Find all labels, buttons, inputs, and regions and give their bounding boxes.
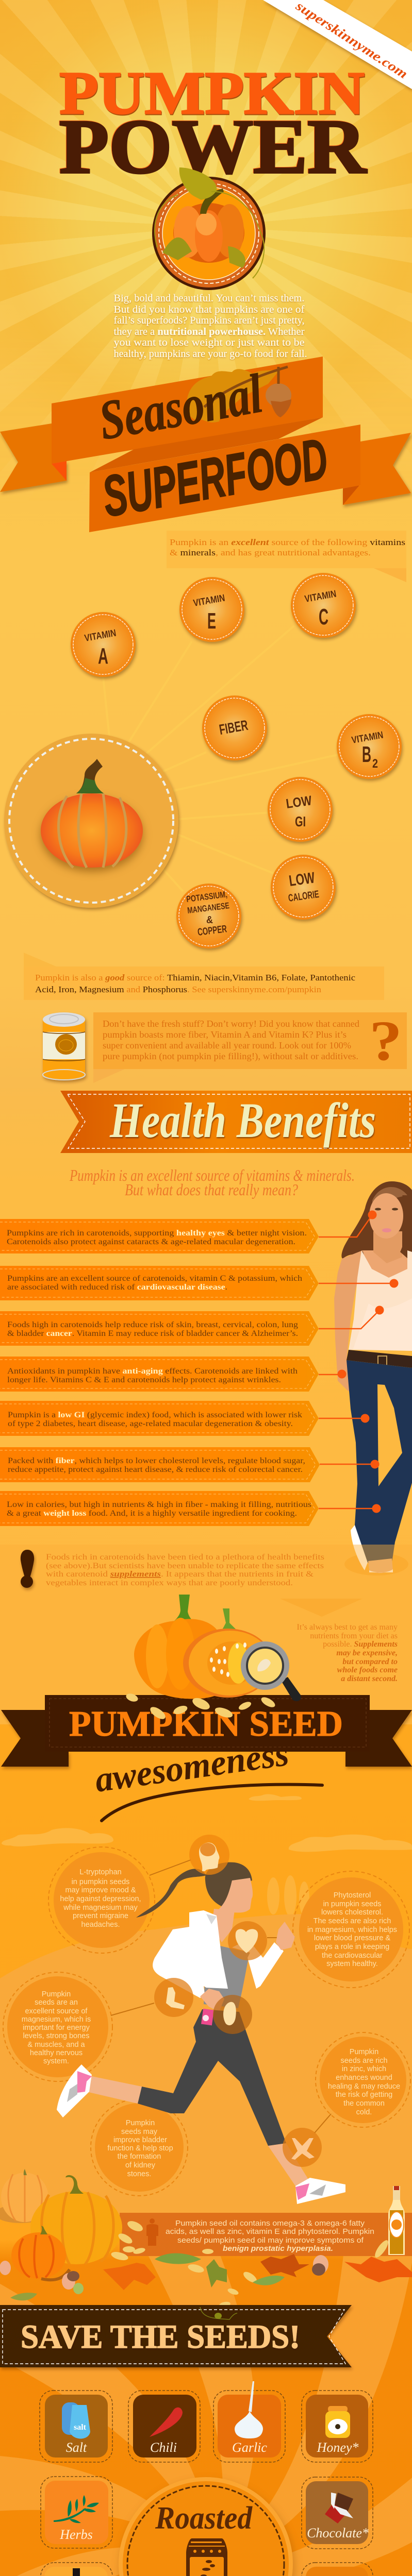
card: salt: Salt [66, 2440, 87, 2455]
info bubble: zinc: enhances wound [336, 2074, 392, 2082]
benefit: low GI: of type 2 diabetes, heart disease, age-related macular degeneration & obesity. [8, 1419, 293, 1428]
callout: get nutrients from diet: whole foods come [337, 1666, 398, 1674]
info bubble: magnesium: seeds are an [35, 1998, 78, 2007]
callout: get nutrients from diet [280, 1599, 398, 1683]
badge: vitamin A: A [98, 643, 108, 669]
info bubble: phytosterol: lowers cholesterol. [321, 1908, 383, 1917]
title [59, 59, 367, 190]
icon: pumpkin [41, 759, 143, 868]
icon: oven [186, 2538, 227, 2576]
pumpkin seeds falling [125, 1692, 276, 1721]
info bubble: tryptophan: while magnesium may [63, 1904, 138, 1912]
badge: vitamin B2: B [362, 742, 371, 767]
icon: exclamation mark [21, 1550, 34, 1588]
band: pumpkin seed oil: benign prostatic hyperplasia. [223, 2245, 333, 2253]
badge: vitamin B2: 2 [372, 757, 378, 771]
card: chocolate: Chocolate* [307, 2526, 369, 2540]
icon: chili [150, 2408, 183, 2437]
badge: potassium manganese copper: POTASSIUM, [186, 889, 228, 904]
badge: low calorie: CALORIE [288, 889, 320, 904]
callout: get nutrients from diet: nutrients from your diet as [310, 1632, 398, 1640]
icon: chocolate bar [325, 2493, 353, 2523]
callout: get nutrients from diet: but compared to [342, 1657, 398, 1666]
intro text: Big, bold and beautiful. You can’t miss them. [113, 293, 304, 304]
info bubble: bladder [91, 2099, 188, 2196]
badge: fiber [202, 696, 267, 760]
panel: roasted pumpkin seeds [121, 2479, 291, 2576]
banner: save the seeds: SAVE THE SEEDS! [21, 2318, 300, 2355]
icon: pumpkin badge [152, 167, 266, 290]
info bubble: phytosterol: in magnesium, which helps [307, 1926, 397, 1934]
connector lines: body to bubbles [111, 1860, 331, 2133]
icon: person [146, 2218, 158, 2246]
info bubble: magnesium [3, 1972, 112, 2081]
badge: vitamin B2 [337, 714, 402, 779]
organ icon: kidney [213, 1995, 252, 2034]
icon: oil bottle [388, 2186, 405, 2255]
info bubble: tryptophan: prevent migraine [73, 1912, 128, 1920]
callout: get nutrients from diet: possible. Supplements [323, 1640, 398, 1649]
benefit: cardiovascular: are associated with reduced risk of cardiovascular disease . [7, 1283, 227, 1292]
badge: low GI: GI [295, 814, 306, 829]
info bubble: bladder: Pumpkin [126, 2119, 155, 2127]
benefit: cardiovascular: Pumpkins are an excellent source of carotenoids, vitamin C & potassium, which [7, 1274, 302, 1283]
corner ribbon: superskinnyme.com [263, 0, 412, 89]
icon: question mark: ? [369, 1009, 402, 1072]
banner: pumpkin seed [1, 1695, 412, 1767]
callout: excellent source: & minerals , and has great nutritional advantages. [170, 548, 371, 557]
icon: sauce bottle [65, 2568, 86, 2576]
callout: get nutrients from diet: It’s always best to get as many [296, 1623, 398, 1632]
callout: supplements warning: Foods rich in carotenoids have been tied to a plethora of health benefits [46, 1553, 324, 1562]
callout: canned pumpkin: Don’t have the fresh stuff? Don’t worry! Did you know that canned [103, 1019, 359, 1029]
card: garlic: Garlic [232, 2440, 267, 2455]
info bubble: magnesium: levels, strong bones [23, 2032, 89, 2040]
benefit: healthy eyes [0, 1211, 376, 1253]
badge: vitamin E: E [207, 608, 216, 634]
callout: good source: Pumpkin is also a good source of: Thiamin, Niacin,Vitamin B6, Folate, Pantothenic [35, 973, 355, 982]
info bubble: tryptophan [48, 1847, 155, 1953]
icon: garlic [235, 2381, 263, 2438]
badge: vitamin C: C [319, 604, 328, 630]
info bubble: tryptophan: may improve mood & [65, 1886, 136, 1894]
illustration: autumn pumpkins and leaves [0, 2169, 412, 2308]
info bubble: phytosterol: lower blood pressure & [314, 1934, 390, 1942]
info bubble: bladder: the formation [118, 2153, 161, 2161]
ribbon: seasonal superfood [0, 357, 411, 532]
callout: supplements warning: vegetables interact in complex ways that are poorly understood. [46, 1579, 293, 1587]
badge: vitamin A [71, 612, 136, 677]
benefit: cardiovascular [0, 1266, 398, 1300]
badge: potassium manganese copper [176, 884, 241, 948]
subheading [69, 1166, 355, 1199]
info bubble: bladder: improve bladder [113, 2136, 167, 2144]
icon: salt and pepper: salt [74, 2423, 87, 2432]
benefit: fiber: Packed with fiber, which helps to lower cholesterol levels, regulate blood sugar, [8, 1456, 305, 1465]
benefit: weight loss: Low in calories, but high in nutrients & high in fiber - making it filling, nutritious [7, 1500, 311, 1509]
connector lines [103, 626, 338, 891]
badge: vitamin B2: VITAMIN [351, 730, 384, 746]
badge: potassium manganese copper: COPPER [197, 923, 228, 938]
benefit: weight loss [0, 1491, 381, 1526]
callout: get nutrients from diet: a distant second. [341, 1674, 398, 1683]
info bubble: tryptophan: headaches. [81, 1921, 120, 1929]
benefit: anti-aging: Antioxidants in pumpkin have anti-aging effects. Carotenoids are linked with [7, 1367, 298, 1376]
info bubble: bladder: of kidney [125, 2161, 156, 2170]
info bubble: zinc: the common [343, 2099, 385, 2108]
card: salt [40, 2391, 112, 2462]
banner: pumpkin seed: PUMPKIN SEED [69, 1704, 343, 1744]
badge: low GI: LOW [285, 792, 313, 811]
benefit: fiber [0, 1447, 380, 1482]
intro text: But did you know that pumpkins are one of [113, 304, 305, 315]
icon: salt and pepper [62, 2402, 90, 2439]
info bubble: zinc: in zinc, which [342, 2065, 386, 2073]
banner: save the seeds [0, 2305, 352, 2367]
band: pumpkin seed oil [120, 2186, 412, 2256]
intro text [113, 293, 307, 360]
callout: supplements warning: (see above).But scientists have been unable to replicate the same effects [46, 1562, 324, 1570]
card: chocolate [302, 2477, 373, 2549]
callout: canned pumpkin: pure pumpkin (not pumpkin pie filling!), without salt or additives. [103, 1051, 358, 1061]
icon: oak leaf and acorn [187, 367, 291, 422]
band: pumpkin seed oil: Pumpkin seed oil contains omega-3 & omega-6 fatty [175, 2219, 365, 2228]
benefit: weight loss: & a great weight loss food. And, it is a highly versatile ingredient for cooking. [7, 1509, 297, 1518]
badge: low calorie [271, 855, 336, 920]
info bubble: magnesium: & muscles, and a [27, 2041, 86, 2049]
card: herbs [41, 2477, 112, 2548]
info bubble: tryptophan: L-tryptophan [79, 1868, 122, 1876]
panel: pumpkin nutrient circle [4, 734, 178, 908]
panel: roasted pumpkin seeds: Roasted [155, 2501, 253, 2536]
scenery: clouds and hill [0, 1794, 412, 2215]
icon: honey jar [325, 2406, 350, 2438]
card: honey [302, 2391, 373, 2462]
intro text: you want to lose weight or just want to be [113, 337, 304, 348]
illustration: woman [334, 1181, 412, 1575]
organ icon: joint [283, 2128, 322, 2167]
corner ribbon: superskinnyme.com: superskinnyme.com [293, 0, 410, 81]
benefit: cancer: & bladder cancer . Vitamin E may reduce risk of bladder cancer & Alzheimer’s. [7, 1329, 298, 1338]
title: PUMPKIN [59, 59, 365, 127]
intro text: fall’s superfoods? Pumpkins aren’t just pretty, [113, 315, 304, 326]
organ icon: muscle [154, 1978, 193, 2017]
card: herbs: Herbs [59, 2527, 93, 2542]
benefit: anti-aging [0, 1357, 347, 1392]
info bubble: magnesium: system. [43, 2057, 69, 2065]
callout: excellent source [167, 531, 406, 582]
info bubble: magnesium: healthy nervous [30, 2049, 83, 2057]
info bubble: magnesium: excellent source of [25, 2007, 88, 2015]
badge: fiber: FIBER [218, 717, 249, 738]
callout: canned pumpkin: super convenient and available all year round. Look out for 100% [103, 1040, 351, 1050]
info bubble: zinc: seeds are rich [340, 2057, 388, 2065]
icon: canned pumpkin [43, 1012, 85, 1080]
badge: vitamin C: VITAMIN [304, 588, 337, 605]
info bubble: zinc: cold. [356, 2108, 372, 2116]
intro text: they are a nutritional powerhouse. Whether [113, 327, 305, 337]
info bubble: magnesium: important for energy [23, 2024, 90, 2032]
badge: vitamin E: VITAMIN [192, 592, 226, 609]
info bubble: phytosterol: Phytosterol [334, 1891, 371, 1900]
info bubble: bladder: function & help stop [107, 2144, 173, 2153]
illustration: runner [57, 1862, 345, 2204]
panel: health benefit rows [0, 1211, 398, 1526]
callout: canned pumpkin [93, 1009, 407, 1083]
info bubble: zinc [316, 2032, 410, 2127]
info bubble: bladder: seeds may [121, 2128, 158, 2136]
info bubble: phytosterol: system healthy. [326, 1960, 378, 1968]
card: garlic [213, 2381, 285, 2462]
band: pumpkin seed oil: acids, as well as zinc, vitamin E and phytosterol. Pumpkin [166, 2228, 374, 2236]
info bubble: bladder: stones. [127, 2170, 151, 2178]
callout: excellent source: Pumpkin is an excellent source of the following vitamins [170, 537, 405, 547]
info bubble: tryptophan: help against depression, [60, 1895, 141, 1903]
benefit: low GI [0, 1401, 369, 1436]
card: worcestershire sauce [41, 2563, 112, 2576]
info bubble: zinc: Pumpkin [350, 2048, 378, 2056]
benefit: cancer: Foods high in carotenoids help reduce risk of skin, breast, cervical, colon, lung [7, 1320, 298, 1329]
callout: good source [24, 953, 384, 1000]
benefit: cancer [0, 1306, 384, 1346]
badge: low GI [268, 777, 333, 842]
card: chili [128, 2391, 200, 2462]
info bubble: phytosterol: The seeds are also rich [314, 1917, 391, 1925]
badge: vitamin E [179, 577, 244, 642]
benefit: healthy eyes: Carotenoids also protect against cataracts & age-related macular degeneration. [7, 1238, 295, 1246]
badge: potassium manganese copper: MANGANESE [187, 901, 230, 916]
organ icon: brain [189, 1835, 229, 1875]
info bubble: zinc: the risk of getting [336, 2091, 392, 2099]
intro text: healthy, pumpkins are your go-to food for fall. [113, 349, 307, 360]
subheading: But what does that really mean? [125, 1180, 298, 1199]
heading: Seasonal: Seasonal [95, 363, 267, 452]
callout: supplements warning [0, 1545, 412, 1724]
heading: awesomeness [93, 1734, 322, 1821]
icon: herbs [54, 2495, 99, 2523]
card: cinnamon [302, 2563, 373, 2576]
badge: vitamin C [291, 573, 356, 638]
card: chili: Chili [150, 2440, 177, 2455]
callout: get nutrients from diet: may be expensive, [336, 1649, 398, 1657]
illustration: pumpkin and magnifier [134, 1595, 301, 1701]
info bubble: phytosterol: in pumpkin seeds [323, 1900, 381, 1908]
info bubble: phytosterol: plays a role in keeping [315, 1943, 389, 1951]
info bubble: magnesium: magnesium, which is [22, 2015, 91, 2024]
title: POWER [59, 104, 367, 190]
benefit: anti-aging: longer life. Vitamins C & E and carotenoids help protect against wrinkles. [7, 1376, 281, 1384]
benefit: healthy eyes: Pumpkins are rich in carotenoids, supporting healthy eyes & better night vision. [7, 1229, 307, 1238]
card: honey: Honey* [317, 2440, 358, 2455]
organ icon: heart [228, 1921, 267, 1960]
band: pumpkin seed oil: seeds/ pumpkin seed oil may improve symptoms of [177, 2236, 364, 2245]
callout: good source: Acid, Iron, Magnesium and Phosphorus . See superskinnyme.com/pumpkin [35, 985, 322, 994]
info bubble: magnesium: Pumpkin [42, 1990, 71, 1998]
badge: low calorie: LOW [288, 869, 316, 890]
badge: potassium manganese copper: & [206, 914, 213, 926]
callout: supplements warning: with carotenoid supplements . It appears that the nutrients in fruit & [46, 1570, 314, 1579]
heading: awesomeness: awesomeness [93, 1734, 291, 1800]
info bubble: phytosterol [293, 1871, 409, 1988]
badge: vitamin A: VITAMIN [84, 628, 117, 644]
swirl background [0, 2256, 412, 2576]
callout: canned pumpkin: pumpkin boasts more fiber, Vitamin A and Vitamin K? Plus it’s [103, 1029, 347, 1040]
info bubble: zinc: healing & may reduce [328, 2082, 400, 2091]
benefit: low GI: Pumpkin is a low GI (glycemic index) food, which is associated with lower risk [8, 1411, 302, 1419]
benefit: fiber: reduce appetite, protect against heart disease, & reduce risk of colorectal cancer. [8, 1465, 303, 1474]
info bubble: phytosterol: the cardiovascular [322, 1952, 383, 1960]
info bubble: tryptophan: in pumpkin seeds [72, 1878, 129, 1886]
